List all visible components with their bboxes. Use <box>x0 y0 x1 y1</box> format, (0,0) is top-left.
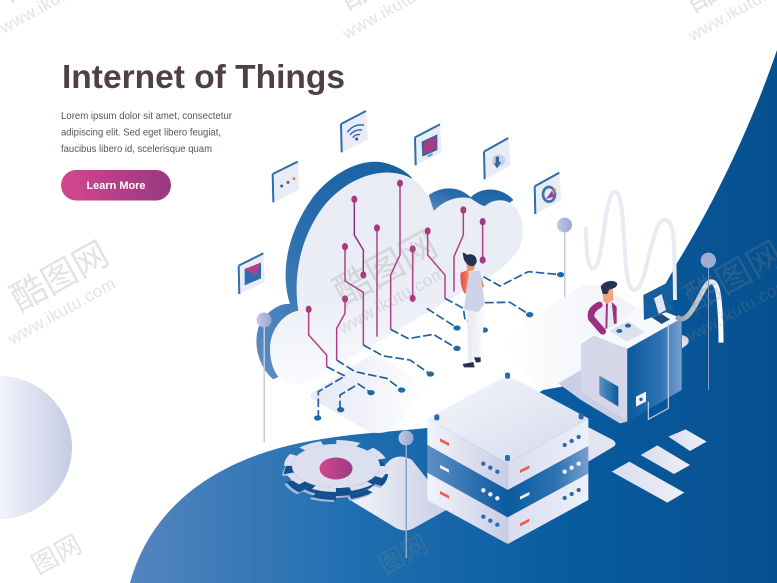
desk panel <box>609 321 645 342</box>
watermark: left: www.ikutu.com <box>4 274 119 349</box>
indicator lights <box>440 438 529 526</box>
background blob: left <box>0 376 72 519</box>
icon card: cloud download <box>484 138 511 179</box>
floor cards <box>612 429 707 503</box>
dashed line end nodes <box>314 272 564 421</box>
middle layer left <box>427 445 508 517</box>
monitor <box>643 280 673 324</box>
status dots <box>481 435 581 527</box>
circuit nodes: pink <box>306 180 486 313</box>
text block <box>61 110 232 155</box>
hair <box>601 281 617 294</box>
shoes <box>463 362 475 367</box>
dashed circuit lines: blue <box>318 272 561 418</box>
server top <box>427 375 588 463</box>
person standing <box>460 253 485 367</box>
gear side <box>288 450 384 498</box>
text block: adipiscing elit. Sed eget libero feugiat, <box>61 126 221 138</box>
watermark: bottom left: 图网 <box>26 529 86 580</box>
desk group <box>558 253 721 423</box>
icon card: dots <box>273 162 299 202</box>
hair <box>463 253 477 266</box>
top layer left <box>427 418 508 490</box>
pin: left of cloud <box>256 312 272 442</box>
corner bolts <box>434 373 584 461</box>
middle layer right <box>508 446 588 517</box>
watermark: centre <box>314 224 454 338</box>
pin: above desk <box>557 218 572 297</box>
text block: Lorem ipsum dolor sit amet, consectetur <box>61 110 232 122</box>
button: learn more <box>61 170 171 200</box>
gear <box>286 442 384 500</box>
desk shadow <box>558 370 627 423</box>
text block: faucibus libero id, scelerisque quam <box>61 143 212 155</box>
gear shadow <box>286 452 382 500</box>
cloud: front face <box>270 173 523 384</box>
head <box>466 262 475 272</box>
watermark: left: 酷图网 <box>4 234 115 319</box>
watermark: centre: www.ikutu.com <box>334 263 449 338</box>
platform: gear and server <box>350 456 450 530</box>
gear centre <box>320 458 352 480</box>
wave line: lavender <box>586 192 675 300</box>
person at desk <box>591 281 617 332</box>
icon card: pie chart <box>535 173 561 214</box>
bottom layer left <box>427 473 508 544</box>
desk top <box>594 303 682 349</box>
wire <box>648 323 668 419</box>
watermark: bottom centre: 图网 <box>373 529 433 580</box>
platform: right of server <box>586 426 616 463</box>
white wave cable <box>677 282 721 343</box>
watermark: centre: 酷图网 <box>327 224 444 313</box>
torso <box>595 302 617 332</box>
top layer right <box>508 418 588 490</box>
arm left <box>591 305 603 331</box>
desk window <box>599 376 618 407</box>
pin: right <box>708 260 709 390</box>
desk left face <box>581 336 627 422</box>
icon card: wifi <box>341 111 368 152</box>
head <box>602 288 613 304</box>
tie <box>605 303 608 329</box>
server stack <box>427 373 588 544</box>
watermark: left <box>0 234 125 349</box>
icon card: monitor <box>415 124 442 165</box>
small ellipse behind desk <box>682 335 689 348</box>
bottom layer right <box>508 473 588 544</box>
circuit lines: pink <box>309 183 483 367</box>
pin: gear <box>398 430 414 558</box>
platform: under desk <box>500 285 640 390</box>
cloud: main back shell <box>256 162 412 379</box>
heading: Internet of Things <box>62 58 345 95</box>
background wave: blue <box>130 50 777 583</box>
legs <box>467 310 485 362</box>
arm right <box>612 302 617 324</box>
platform: under cloud circuits <box>310 356 430 433</box>
plug <box>636 392 646 407</box>
torso <box>464 271 485 312</box>
watermark: right <box>658 234 777 349</box>
cloud: right bump back shell <box>429 188 513 213</box>
icon card: mail <box>239 253 265 294</box>
cloud <box>256 162 564 421</box>
desk right face <box>627 318 682 422</box>
arms <box>460 270 471 294</box>
gear top <box>288 442 384 490</box>
button: learn more: Learn More <box>86 180 146 192</box>
